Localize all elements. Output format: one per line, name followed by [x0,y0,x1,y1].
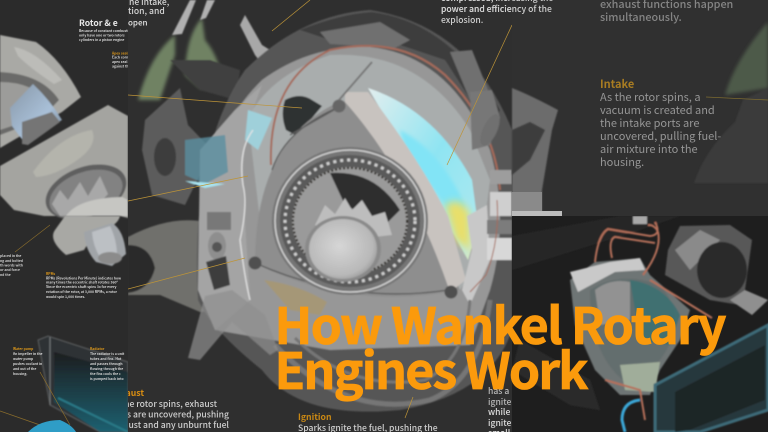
blue port [185,135,228,184]
text block: intake: the intake ports are [600,115,699,131]
text block: rotor placement: th words with [0,262,23,268]
text block: RPMs: many times the eccentric shaft rotates 360° [46,280,118,284]
text block: apex seals: Each corner [112,54,132,60]
blue coolant hose [622,400,640,432]
left jacket [197,88,260,302]
gold tip glow [264,280,327,315]
text block: apex seals [112,52,128,68]
text block: intake [600,89,721,170]
leader line [15,225,50,252]
text block: intake: uncovered, pulling fuel- [600,128,721,144]
leader line [706,97,768,100]
image fragment: intake right [694,22,768,183]
housing translucent [199,47,500,350]
red coolant ring [271,46,500,190]
white inner housing edge [240,130,253,300]
panel: right text [441,0,768,216]
text block: intake: housing. [600,154,644,170]
gear teeth [315,198,392,238]
housing fins [320,22,490,100]
heading: rotor: Rotor & e [79,17,118,29]
shaft [10,84,62,142]
leader lines [40,372,70,425]
text block: rotor intro: only have one or two rotors [79,32,125,38]
text block: ignition [298,410,438,432]
text block: dual spark fragment: ignite [488,417,512,429]
holes [208,232,226,260]
text block: apex seals: apex seal [112,59,127,64]
thermostat [633,216,647,224]
text block: exhaust functions: simultaneously. [600,9,682,25]
text block: water pump [12,346,42,376]
heading fragment: open [128,18,147,28]
spark plugs right [470,90,512,292]
engine artwork [128,0,512,412]
text block: rotor placement: or and force [0,267,20,272]
text block: compression continued: power and efficiency of the [441,3,552,15]
spark plug top [172,0,270,59]
text block: radiator: Radiator [90,346,105,351]
text block: water pump: An impeller in the [12,351,42,356]
text block: intake fragment [128,0,170,17]
coolant pipes orange [595,222,712,420]
panel: rotor and eccentric shaft exploded view [0,0,134,432]
text block: RPMs: rotation of the rotor, at 3,000 RPMs, a rotor [46,289,117,294]
text block: water pump: and out of the [13,366,36,371]
dark interior [330,173,400,225]
text block: radiator: tubes and fins. Hot [90,356,122,361]
leader lines [128,0,512,418]
icon: water pump blue [28,420,76,432]
text block: intake fragment: tion, and [128,5,165,17]
rotor piece lower [0,104,128,219]
text block: dual spark fragment: has a [488,385,509,397]
text block: exhaust: ports are uncovered, pushing [109,408,229,420]
text block: water pump: housing. [13,371,27,376]
text block: apex seals: Apex seals [111,50,130,56]
text block: radiator: the fins cools the c [90,371,121,376]
housing outer [197,10,512,412]
text block: rotor intro: Because of constant combustion, [79,28,134,33]
text block: RPMs: would spin 1,000 times. [46,294,85,299]
text block: RPMs: Since the eccentric shaft spins 3x for every [46,284,117,289]
text block: rotor placement: nd the [0,272,11,277]
text block: radiator: The radiator is a unit [90,351,125,356]
text block: exhaust functions [600,0,733,25]
text block: radiator: flowing through the [90,366,123,371]
text block: intake: air mixture into the [600,141,698,157]
text block: water pump: pushes coolant in [13,361,42,366]
shaft lower part [53,216,126,266]
text block: rotor placement: placed in the [0,253,21,258]
chamber fill [248,55,490,290]
panel: cooling system inset [512,216,768,432]
exhaust duct [128,220,204,312]
title: Engines Work [274,332,588,404]
text block: rotor placement [0,253,23,277]
text block: compression: explosion. [441,14,483,26]
text block: dual spark fragment: while [488,406,510,418]
combustion chamber cyan [368,88,478,260]
text block: compression: power and efficiency of the [441,3,552,15]
text block: ignition: Ignition [298,410,332,423]
text block: water pump: water pump [13,356,34,361]
intake duct [170,60,240,100]
title [274,287,727,404]
text block: exhaust: As the rotor spins, exhaust [109,398,218,410]
text block: water pump: Water pump [13,346,34,351]
panel: engine cutaway [128,0,512,432]
text block: RPMs: RPMs (Revolutions Per Minute) indicates how [46,276,121,280]
text block: intake: vacuum is created and [600,102,715,118]
yellow glow [445,202,470,250]
radiator [38,336,128,432]
text block: intake: As the rotor spins, a [600,89,701,105]
text block: radiator [90,346,125,381]
text block: apex seals: against the [112,64,131,68]
rotor [248,62,466,298]
rotor piece upper [0,35,81,148]
text block: RPMs [46,271,121,299]
text block: exhaust [109,386,229,431]
text block: exhaust: Exhaust [110,386,144,399]
heading: intake: Intake [600,76,634,92]
text block: compression [441,0,553,26]
housing lower [275,300,490,404]
text block: RPMs: RPMs [46,271,55,276]
text block: exhaust: exhaust and any unburnt fuel [109,419,229,431]
text block: rotor placement: ng and bolted [0,258,23,263]
ring gear [272,147,428,295]
housing right white [462,205,490,305]
text block: radiator: and passes through [90,361,123,366]
text block: dual spark fragment [488,385,512,432]
title: How Wankel Rotary [274,287,727,359]
engine core [570,258,690,395]
text block: dual spark fragment: ignite [488,396,512,408]
radiator [655,325,768,432]
intake ports green [138,18,222,100]
text block: radiator: is pumped back into [90,376,124,381]
text block: rotor intro [79,29,128,42]
text block: rotor intro: cylinders in a piston engine [79,37,124,42]
alternator [665,225,752,305]
